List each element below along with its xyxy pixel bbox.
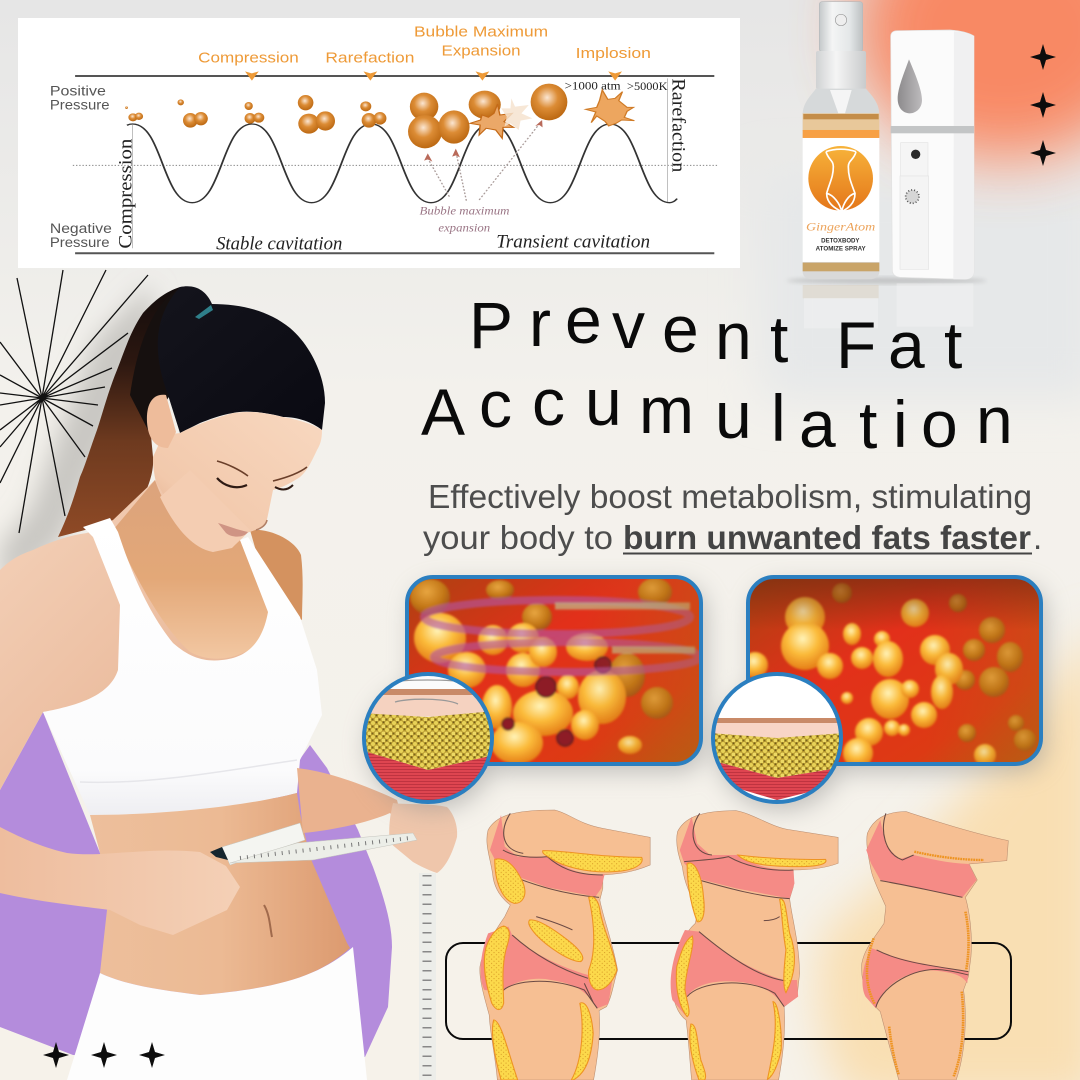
body 1 briefs (481, 927, 612, 1008)
orange stage labels (198, 23, 651, 66)
growing bubbles (125, 84, 567, 148)
pressure labels: Pressure (50, 97, 110, 113)
top shade (750, 579, 1039, 626)
collapsing bubble (470, 104, 514, 138)
cavitation labels (216, 231, 650, 253)
body 2 contour lines (684, 813, 793, 1007)
base liquid (803, 263, 879, 271)
body 1 contour lines (503, 813, 603, 1008)
device sensor panel (901, 143, 928, 176)
tape strip on waist (222, 823, 305, 865)
top band seam (80, 760, 297, 782)
body 2: less fat (671, 811, 838, 1080)
ultrasonic cavitation chart panel (18, 18, 740, 268)
bottle base (803, 262, 879, 279)
title: Accumulation (421, 365, 1013, 462)
body 1 silhouette (480, 810, 650, 1080)
body 2 briefs (671, 930, 798, 1015)
midriff (90, 793, 350, 995)
logo circle (808, 146, 873, 211)
hair band (195, 305, 213, 319)
bottle collar (816, 51, 866, 89)
cap nozzle (835, 14, 847, 26)
glass glint (830, 90, 852, 113)
fat bubbles before (410, 578, 700, 764)
product name: DETOXBODY (821, 237, 860, 244)
glass shoulder (803, 89, 879, 137)
panel border (748, 577, 1041, 764)
body 1: most fat (480, 810, 650, 1080)
vertical tape marks (422, 875, 432, 1080)
body 3 slim fat deposits (867, 852, 984, 1077)
ultrasound rings (424, 600, 700, 672)
purple blob (0, 712, 392, 1060)
body 3: toned result (862, 812, 1008, 1080)
tape clip (210, 847, 228, 860)
left forearm and hand (0, 827, 240, 935)
green glow bands (555, 606, 695, 650)
ear (147, 395, 176, 448)
cavitation labels: Transient cavitation (496, 231, 650, 252)
pressure labels: Positive (50, 83, 106, 99)
liquid line (803, 114, 879, 119)
orange stage labels: Compression (198, 49, 299, 66)
dark hair root (130, 287, 205, 430)
stage markers (245, 71, 622, 81)
orange stage labels: Expansion (442, 42, 521, 59)
body 2 bra (680, 817, 794, 899)
panel border (407, 577, 701, 764)
product name: ATOMIZE SPRAY (816, 246, 866, 253)
cavitation labels: Stable cavitation (216, 233, 342, 253)
orange stage labels: Implosion (576, 45, 651, 61)
panel shadows (367, 585, 1046, 810)
implosion values: >5000K (627, 80, 668, 93)
body 3 contour lines (876, 813, 968, 1007)
subtitle: Effectively boost metabolism, stimulating (428, 478, 1032, 515)
pressure axes (75, 76, 714, 253)
tape strip lower (230, 833, 417, 863)
orange stage labels: Bubble Maximum (414, 23, 548, 40)
body 3 silhouette (862, 812, 1008, 1080)
neck and left shoulder (0, 480, 300, 790)
stars: top right (1030, 44, 1056, 166)
implosion burst (586, 90, 634, 126)
rounded frame behind body figures (446, 943, 1011, 1039)
woman measuring her waist (0, 286, 457, 1080)
device band (891, 126, 974, 133)
body shape progression (480, 810, 1008, 1080)
bubble maximum note: expansion (438, 221, 490, 235)
vertical axis labels: Compression (114, 138, 136, 249)
product shadow (787, 277, 987, 284)
dark hair cap (158, 286, 325, 433)
mist holes (906, 190, 919, 203)
vertical tape (419, 873, 436, 1080)
fat bubbles after (742, 583, 1036, 768)
body 1 bra (490, 815, 605, 897)
right arm (297, 768, 405, 833)
fading burst (501, 98, 532, 130)
body 3 bra (866, 820, 976, 897)
body 2 silhouette (672, 811, 838, 1080)
right shoulder (250, 530, 303, 620)
lips (218, 523, 248, 537)
title (421, 283, 1013, 462)
white sports top (43, 518, 322, 815)
pointer arrows (428, 123, 540, 201)
chin over neck (160, 470, 250, 552)
mist button panel (900, 176, 929, 269)
pressure labels: Pressure (50, 235, 110, 250)
body 3 briefs (862, 948, 968, 1008)
face (153, 412, 322, 552)
title: Prevent Fat (469, 283, 962, 382)
subtitle (423, 478, 1042, 556)
pressure sine wave (127, 124, 677, 203)
product name (816, 237, 866, 253)
dark cells (502, 657, 611, 746)
inset: skin cross-section before (360, 670, 500, 803)
stars: bottom left (43, 1042, 165, 1068)
body 2 fat deposits (676, 855, 826, 1080)
bubble maximum note (420, 205, 510, 235)
white shorts (67, 947, 367, 1080)
liquid band (803, 113, 879, 131)
neck shade and chest (113, 480, 268, 659)
inset: skin cross-section after (710, 674, 845, 802)
pressure labels: Negative (50, 221, 112, 236)
subtitle: burn unwanted fats faster (623, 519, 1031, 556)
bottle reflection (803, 283, 973, 328)
orange stage labels: Rarefaction (325, 49, 414, 66)
top shade (612, 579, 699, 752)
vertical axis labels (114, 78, 690, 249)
ponytail (58, 287, 205, 537)
spray bottle and atomizer device (787, 2, 987, 328)
clear spray cap (819, 2, 863, 52)
right hand (389, 803, 457, 873)
implosion values: >1000 atm (565, 79, 621, 93)
brand name: GingerAtom (806, 220, 876, 234)
arrow heads (424, 120, 543, 162)
navel (264, 905, 272, 937)
white label (803, 138, 879, 262)
panel shade (946, 586, 1039, 762)
panel: before, ultrasonic fat cells (409, 579, 699, 762)
orange band (803, 130, 879, 138)
panel: after, shrunken fat cells (750, 579, 1039, 762)
device side shade (953, 31, 974, 279)
bubble maximum note: Bubble maximum (420, 205, 510, 218)
subtitle: . (1033, 519, 1042, 556)
tape marks (240, 838, 410, 858)
fat cell comparison panels (360, 570, 1050, 810)
implosion values (565, 79, 668, 93)
atomizer device body (891, 30, 974, 279)
vertical axis labels: Rarefaction (668, 78, 690, 173)
sunburst decoration (0, 270, 148, 533)
pressure labels (50, 83, 112, 250)
water drop window (898, 59, 922, 113)
chart drawing (50, 23, 717, 253)
body 1 fat deposits (484, 851, 642, 1080)
logo body outline (826, 149, 856, 212)
facial features (217, 461, 307, 530)
sensor (911, 150, 920, 159)
subtitle: your body to (423, 519, 613, 556)
